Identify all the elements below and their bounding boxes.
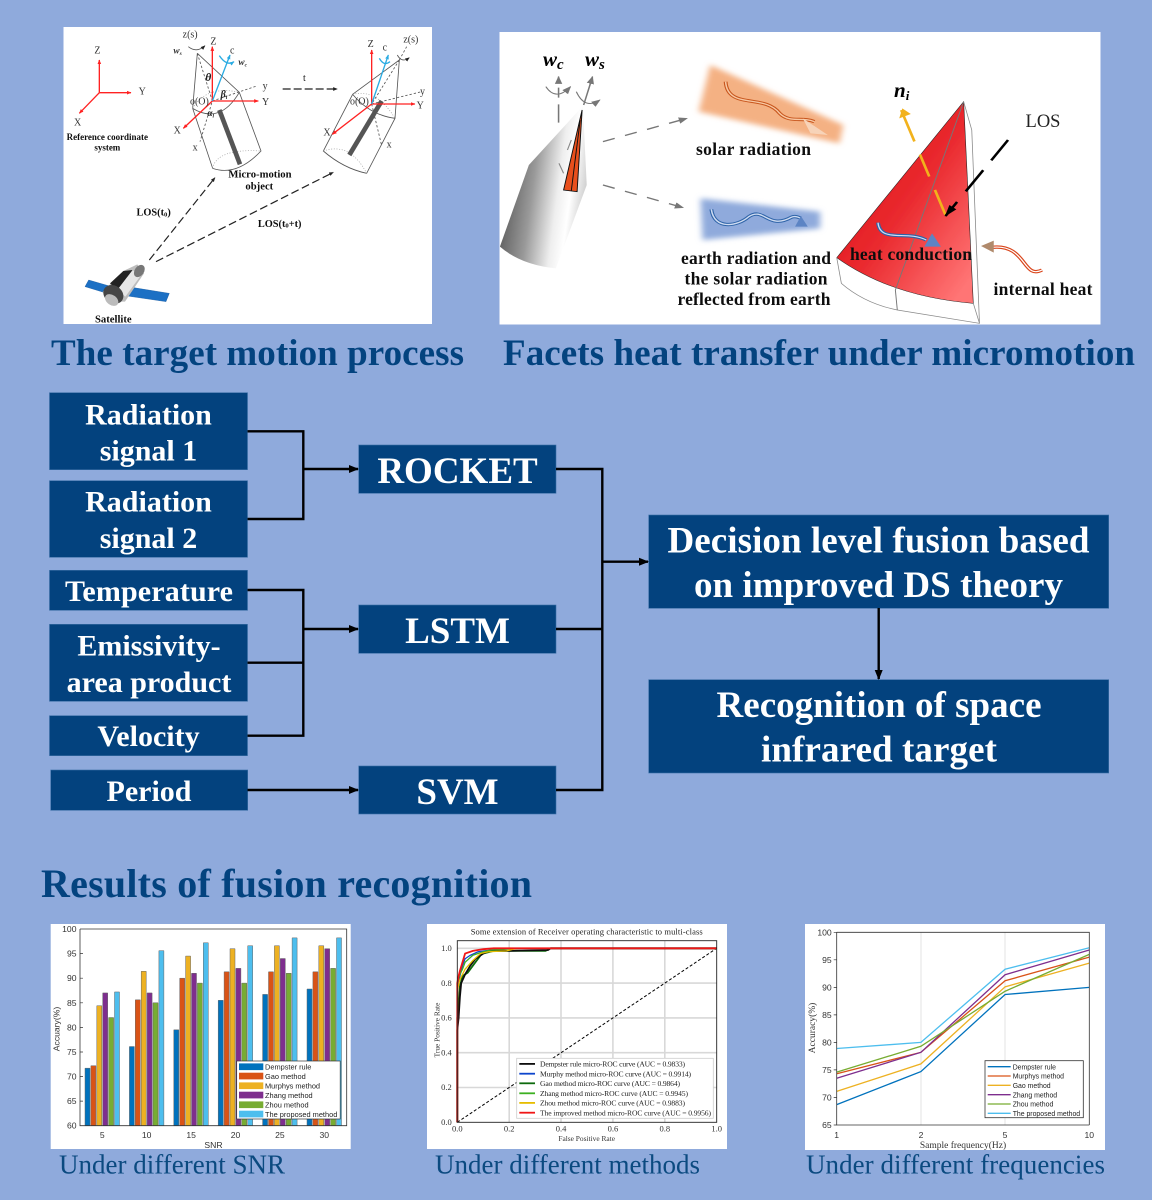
- axes: 1.0: [711, 1124, 722, 1134]
- legend: The improved method micro-ROC curve (AUC = 0.9956): [540, 1108, 711, 1117]
- axes: 5: [100, 1130, 105, 1140]
- grid: [921, 932, 1005, 1125]
- micro-motion object at t0: s: [179, 51, 183, 57]
- axes: 10: [1085, 1130, 1094, 1140]
- axes: 0.6: [608, 1124, 618, 1134]
- facet labels: internal heat: [994, 279, 1093, 299]
- arrow: period to SVM: [248, 789, 358, 791]
- arrow: features to LSTM: [248, 590, 358, 736]
- line of sight arrows: ): [167, 208, 171, 219]
- legend: [517, 1058, 713, 1118]
- input: emissivity-area product: Emissivity-: [77, 630, 221, 662]
- lines: [837, 948, 1089, 1105]
- axes: 90: [822, 982, 832, 992]
- grid: [457, 941, 717, 1122]
- facet labels: LOS: [1026, 112, 1060, 132]
- recognition result box: [649, 680, 1109, 773]
- axes: 20: [231, 1130, 240, 1140]
- axes: 0.8: [659, 1124, 670, 1134]
- micro-motion object at t0+t: [323, 34, 425, 173]
- chart: ROC curves: [427, 924, 727, 1149]
- axes: 2: [919, 1130, 924, 1140]
- facet labels: i: [906, 88, 910, 103]
- micro-motion object at t0: l: [213, 113, 215, 119]
- micro-motion object at t0: c: [245, 62, 248, 68]
- line of sight arrows: [137, 172, 333, 262]
- axes: 30: [320, 1130, 329, 1140]
- classifier: ROCKET: [359, 445, 556, 493]
- legend: Murphy method micro-ROC curve (AUC = 0.9914): [540, 1069, 691, 1078]
- solar radiation band: [699, 65, 843, 143]
- reference coordinate system: system: [94, 142, 121, 152]
- recognition result box: Recognition of space: [716, 685, 1042, 726]
- panel: target motion process: [64, 27, 432, 325]
- micro-motion object at t0+t: Z: [368, 39, 374, 50]
- micro-motion object at t0+t: o(O): [350, 96, 369, 107]
- legend: Zhang method: [265, 1091, 313, 1100]
- ROC lines: [457, 948, 717, 1122]
- micro-motion object at t0+t: x: [387, 140, 392, 151]
- micro-motion object at t0: o(O): [190, 96, 209, 107]
- micro-motion object at t0: c: [230, 46, 235, 57]
- input: radiation signal 2: Radiation: [85, 486, 212, 518]
- micro-motion object at t0: y: [263, 81, 268, 92]
- micro-motion object at t0+t: z(s): [403, 34, 418, 45]
- micro-motion object at t0+t: c: [383, 42, 388, 53]
- axes: [807, 927, 1094, 1151]
- decision fusion box: [649, 515, 1109, 608]
- legend: Zhou method: [1013, 1102, 1053, 1109]
- facet labels: w: [543, 47, 557, 71]
- axes: 0.2: [441, 1082, 452, 1092]
- micro-motion object at t0: object: [245, 182, 274, 193]
- reference coordinate system: [67, 46, 148, 152]
- classifier: SVM: SVM: [416, 772, 499, 813]
- dashed arrows: [603, 118, 687, 208]
- axes: 65: [822, 1120, 832, 1130]
- legend: Gao method: [265, 1072, 306, 1081]
- facet labels: s: [598, 57, 605, 73]
- micro-motion object at t0+t: X: [323, 127, 331, 138]
- micro-motion object at t0: θ: [205, 72, 211, 84]
- axes: 25: [275, 1130, 285, 1140]
- axes: 70: [822, 1092, 832, 1102]
- axes: 0.2: [504, 1124, 515, 1134]
- input: emissivity-area product: area product: [67, 666, 231, 699]
- legend: Zhou method: [265, 1101, 309, 1110]
- axes: 75: [822, 1065, 832, 1075]
- classifier: SVM: [359, 766, 556, 814]
- decision fusion box: Decision level fusion based: [668, 520, 1090, 562]
- legend: Dempster rule micro-ROC curve (AUC = 0.9833): [540, 1060, 685, 1069]
- legend: Murphys method: [1013, 1074, 1064, 1081]
- micro-motion object at t0: [173, 30, 292, 193]
- heated facet: [837, 102, 1042, 323]
- input: radiation signal 1: Radiation: [85, 398, 212, 432]
- input: period: Period: [107, 775, 192, 808]
- cone body with highlighted facet: [500, 77, 600, 268]
- axes: 90: [67, 973, 77, 983]
- chart: ROC curves: Some extension of Receiver operating characteristic to multi-class: [471, 927, 703, 937]
- heading: results: Results of fusion recognition: [41, 861, 532, 906]
- legend: Gao method: [1013, 1083, 1051, 1090]
- classifier: LSTM: LSTM: [405, 611, 510, 652]
- facet labels: solar radiation: [696, 139, 811, 159]
- heading: heat transfer: Facets heat transfer under micromotion: [503, 333, 1135, 374]
- micro-motion object at t0: β: [221, 90, 226, 101]
- facet labels: c: [557, 57, 564, 73]
- axes: SNR: [204, 1140, 223, 1150]
- line of sight arrows: 0: [164, 211, 168, 218]
- icon: satellite: [85, 263, 169, 325]
- input: velocity: Velocity: [97, 720, 200, 753]
- facet labels: reflected from earth: [678, 289, 831, 309]
- axes: 95: [822, 955, 832, 965]
- input: temperature: Temperature: [65, 575, 233, 608]
- axes: 0.0: [441, 1117, 452, 1127]
- axes: False Positive Rate: [558, 1134, 616, 1143]
- legend: [985, 1061, 1083, 1118]
- legend: The proposed method: [265, 1110, 337, 1119]
- motion arrow t: [283, 73, 337, 89]
- legend: Dempster rule: [265, 1063, 311, 1072]
- legend: Gao method micro-ROC curve (AUC = 0.9864): [540, 1079, 680, 1088]
- axes: 85: [67, 998, 77, 1008]
- axes: True Positive Rate: [432, 1002, 442, 1057]
- chart: accuracy under different SNR: [51, 924, 351, 1150]
- legend: Dempster rule: [1013, 1064, 1056, 1071]
- axes: [52, 924, 347, 1150]
- micro-motion object at t0: Micro-motion: [228, 170, 292, 181]
- facet labels: heat conduction: [850, 244, 972, 264]
- axes: 15: [186, 1130, 196, 1140]
- axes: 1.0: [441, 943, 452, 953]
- facet labels: n: [894, 78, 906, 102]
- axes: 80: [67, 1022, 77, 1032]
- bars: [85, 938, 342, 1126]
- input: radiation signal 2: signal 2: [100, 522, 197, 555]
- axes: [432, 941, 722, 1143]
- line of sight arrows: 0: [285, 223, 289, 230]
- axes: 0.4: [556, 1124, 567, 1134]
- legend: Murphys method: [265, 1082, 320, 1091]
- reference coordinate system: Reference coordinate: [67, 132, 148, 142]
- icon: satellite: Satellite: [95, 314, 132, 325]
- input: velocity: [50, 716, 248, 756]
- axes: Sample frequency(Hz): [920, 1140, 1006, 1151]
- input: radiation signal 2: [50, 481, 248, 557]
- axes: Accuary(%): [52, 1007, 62, 1051]
- arrow: fusion to recognition: [878, 608, 880, 679]
- arrow: radiation signals to ROCKET: [248, 431, 358, 519]
- axes: 0.0: [452, 1124, 463, 1134]
- caption: SNR: Under different SNR: [59, 1150, 285, 1180]
- input: period: [51, 770, 248, 810]
- axes: 0.8: [441, 978, 452, 988]
- line of sight arrows: +t): [289, 219, 301, 230]
- axes: 100: [62, 924, 77, 934]
- axes: 85: [822, 1010, 832, 1020]
- earth radiation band: [701, 198, 820, 240]
- axes: 75: [67, 1047, 77, 1057]
- input: radiation signal 1: signal 1: [100, 434, 197, 468]
- axes: Accuracy(%): [807, 1003, 818, 1053]
- reference coordinate system: X: [74, 117, 82, 128]
- legend: Zhang method: [1013, 1092, 1057, 1099]
- recognition result box: infrared target: [761, 730, 998, 771]
- line of sight arrows: LOS(t: [258, 219, 285, 230]
- axes: 60: [67, 1121, 77, 1131]
- axes: 10: [142, 1130, 152, 1140]
- micro-motion object at t0: α: [207, 109, 213, 119]
- axes: 100: [817, 927, 832, 937]
- axes: 0.6: [441, 1013, 452, 1023]
- legend: Zhang method micro-ROC curve (AUC = 0.9945): [540, 1089, 688, 1098]
- line of sight arrows: LOS(t: [137, 208, 164, 219]
- axes: 95: [67, 949, 77, 959]
- flow chart: [50, 393, 1109, 814]
- axes: 1: [834, 1130, 839, 1140]
- axes: 65: [67, 1096, 77, 1106]
- micro-motion object at t0: X: [174, 125, 182, 136]
- axes: 70: [67, 1072, 77, 1082]
- panel: facets heat transfer: [500, 32, 1100, 324]
- classifier: LSTM: [359, 605, 556, 653]
- micro-motion object at t0: w: [238, 58, 245, 68]
- micro-motion object at t0: x: [193, 143, 198, 154]
- legend: [237, 1061, 340, 1119]
- facet labels: the solar radiation: [684, 268, 828, 288]
- axes: 80: [822, 1037, 832, 1047]
- reference coordinate system: Y: [139, 87, 146, 98]
- arrow: classifiers to decision fusion: [556, 469, 648, 790]
- caption: frequencies: Under different frequencies: [806, 1150, 1105, 1180]
- input: radiation signal 1: [50, 393, 248, 470]
- axes: 0.4: [441, 1047, 452, 1057]
- micro-motion object at t0+t: y: [420, 86, 425, 97]
- caption: methods: Under different methods: [435, 1150, 700, 1180]
- classifier: ROCKET: ROCKET: [377, 451, 538, 492]
- legend: The proposed method: [1013, 1111, 1080, 1118]
- input: emissivity-area product: [50, 624, 248, 701]
- legend: Zhou method micro-ROC curve (AUC = 0.9883): [540, 1099, 685, 1108]
- facet labels: [543, 47, 1093, 309]
- micro-motion object at t0: w: [173, 47, 180, 57]
- facet labels: w: [585, 47, 599, 71]
- heading: target motion: The target motion process: [51, 333, 464, 374]
- axes: 5: [1003, 1130, 1008, 1140]
- micro-motion object at t0+t: Y: [417, 100, 424, 111]
- micro-motion object at t0: Y: [262, 97, 269, 108]
- chart: accuracy under different frequencies: [805, 924, 1105, 1151]
- facet labels: earth radiation and: [681, 248, 831, 268]
- micro-motion object at t0: l: [226, 95, 228, 101]
- motion arrow t: t: [303, 73, 306, 84]
- decision fusion box: on improved DS theory: [694, 565, 1064, 606]
- micro-motion object at t0: Z: [210, 36, 216, 47]
- reference coordinate system: Z: [94, 46, 100, 57]
- micro-motion object at t0: z(s): [183, 30, 198, 41]
